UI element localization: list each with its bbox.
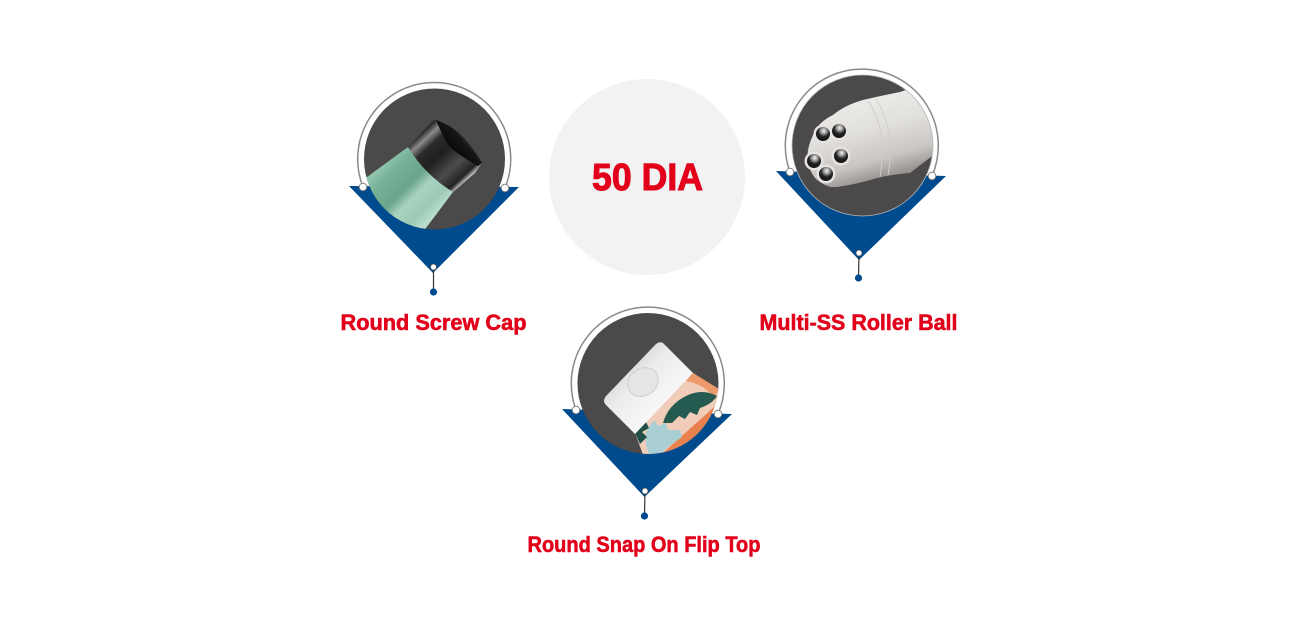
blue triangle pointer <box>776 171 946 260</box>
connector line and dots <box>644 491 646 516</box>
label: Round Screw Cap <box>340 310 526 335</box>
steel balls <box>804 122 850 184</box>
ring joint dots <box>572 406 580 414</box>
product photo: white flip top on patterned bottle <box>578 313 718 454</box>
outer ring arc <box>358 83 511 188</box>
product photo: green bottle with black screw cap <box>364 88 505 230</box>
blue triangle pointer <box>349 186 519 273</box>
connector line and dots <box>858 253 860 278</box>
item: Round Screw Cap <box>340 83 526 335</box>
dark circle edge <box>792 75 933 216</box>
connector line and dots <box>432 267 434 292</box>
item: Round Snap On Flip Top <box>528 307 760 557</box>
ring joint dots <box>359 183 367 191</box>
center label: 50 DIA <box>592 157 703 199</box>
center circle: 50 DIA <box>549 79 745 275</box>
dark leaf <box>663 392 717 423</box>
item: Multi-SS Roller Ball <box>760 69 958 335</box>
outer ring arc <box>571 307 724 414</box>
light blue leaf <box>646 420 682 456</box>
label: Round Snap On Flip Top <box>528 532 760 557</box>
outer ring arc <box>785 69 938 176</box>
label: Multi-SS Roller Ball <box>760 310 958 335</box>
ring joint dots <box>786 168 794 176</box>
blue triangle pointer <box>562 409 732 497</box>
product photo: white roller with steel balls <box>792 75 933 216</box>
